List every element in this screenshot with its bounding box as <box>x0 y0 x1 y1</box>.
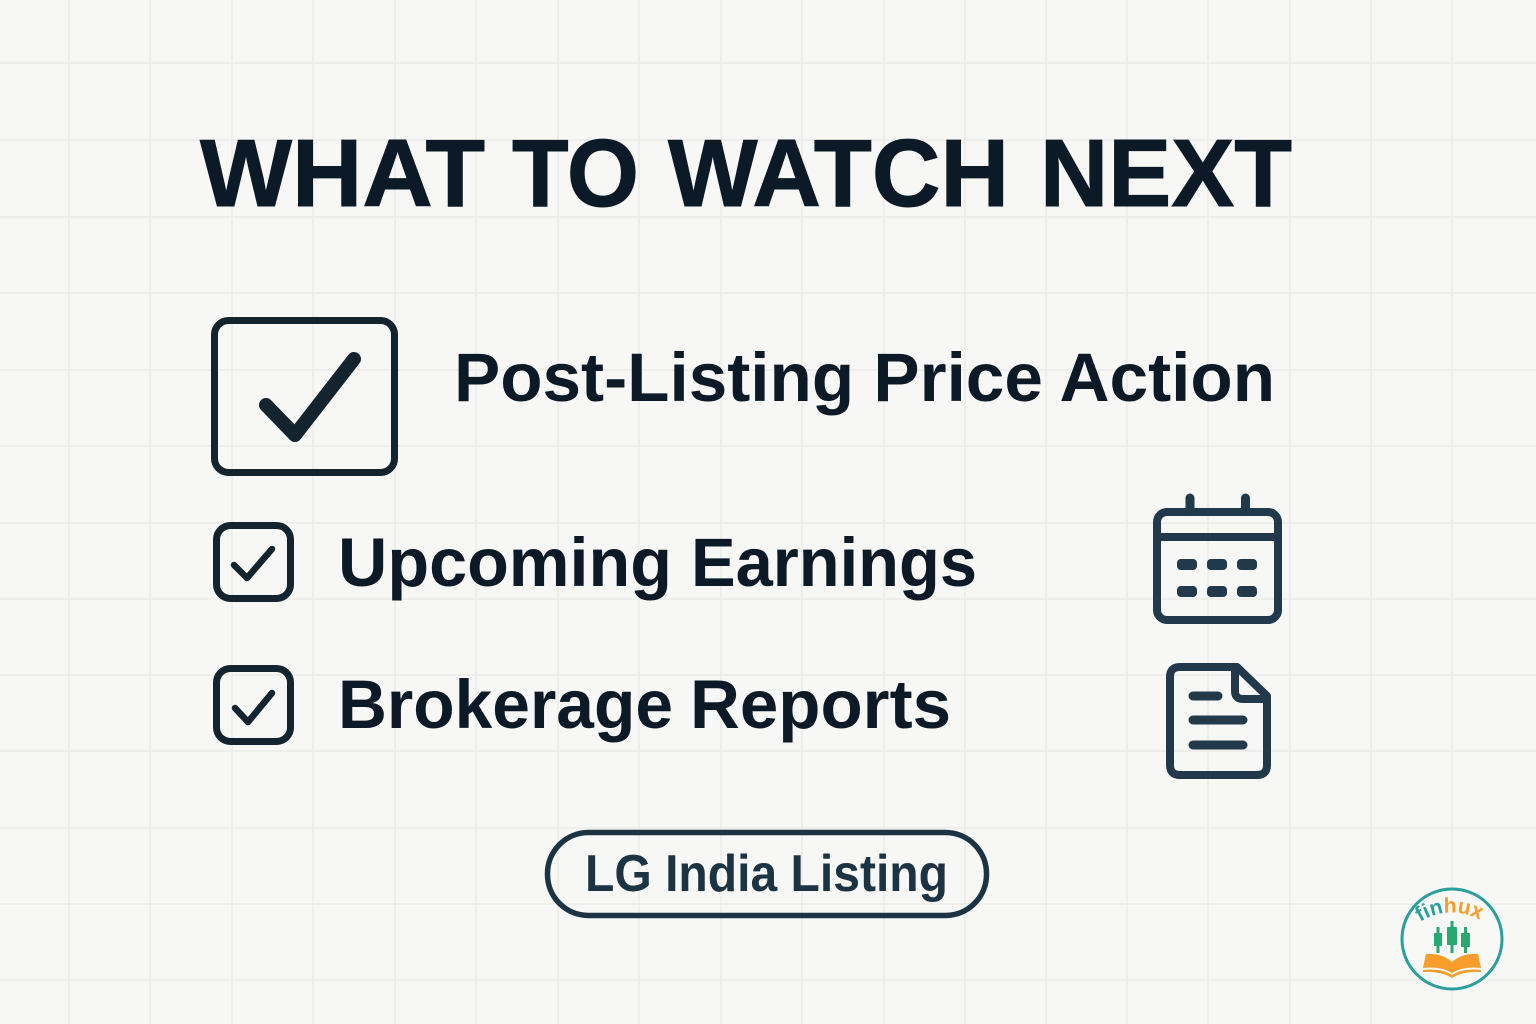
checklist item: Brokerage Reports: Brokerage <box>338 666 673 743</box>
title <box>200 120 1292 227</box>
icon: large checkbox <box>214 320 394 472</box>
icon: document <box>1170 667 1267 775</box>
logo: finhux: finhux <box>1415 897 1484 921</box>
tag: LG India Listing: LG India Listing <box>585 845 948 903</box>
checklist item: Upcoming Earnings <box>338 524 977 601</box>
title: WHAT <box>200 120 485 227</box>
icon: checkbox for upcoming earnings <box>216 526 290 598</box>
title: NEXT <box>1040 120 1292 227</box>
tag: LG India Listing <box>548 832 986 916</box>
checklist item: Upcoming Earnings: Earnings <box>691 524 977 601</box>
logo: finhux <box>1400 888 1504 990</box>
icon: checkbox for brokerage reports <box>216 668 290 742</box>
icon: calendar <box>1157 498 1278 620</box>
checklist item: Upcoming Earnings: Upcoming <box>338 524 672 601</box>
title: TO <box>512 120 639 227</box>
checklist item: Post-Listing Price Action: Post-Listing Price Action <box>454 339 1275 416</box>
checklist item: Brokerage Reports <box>338 666 951 743</box>
title: WATCH <box>668 120 1009 227</box>
checklist item: Brokerage Reports: Reports <box>690 666 951 743</box>
